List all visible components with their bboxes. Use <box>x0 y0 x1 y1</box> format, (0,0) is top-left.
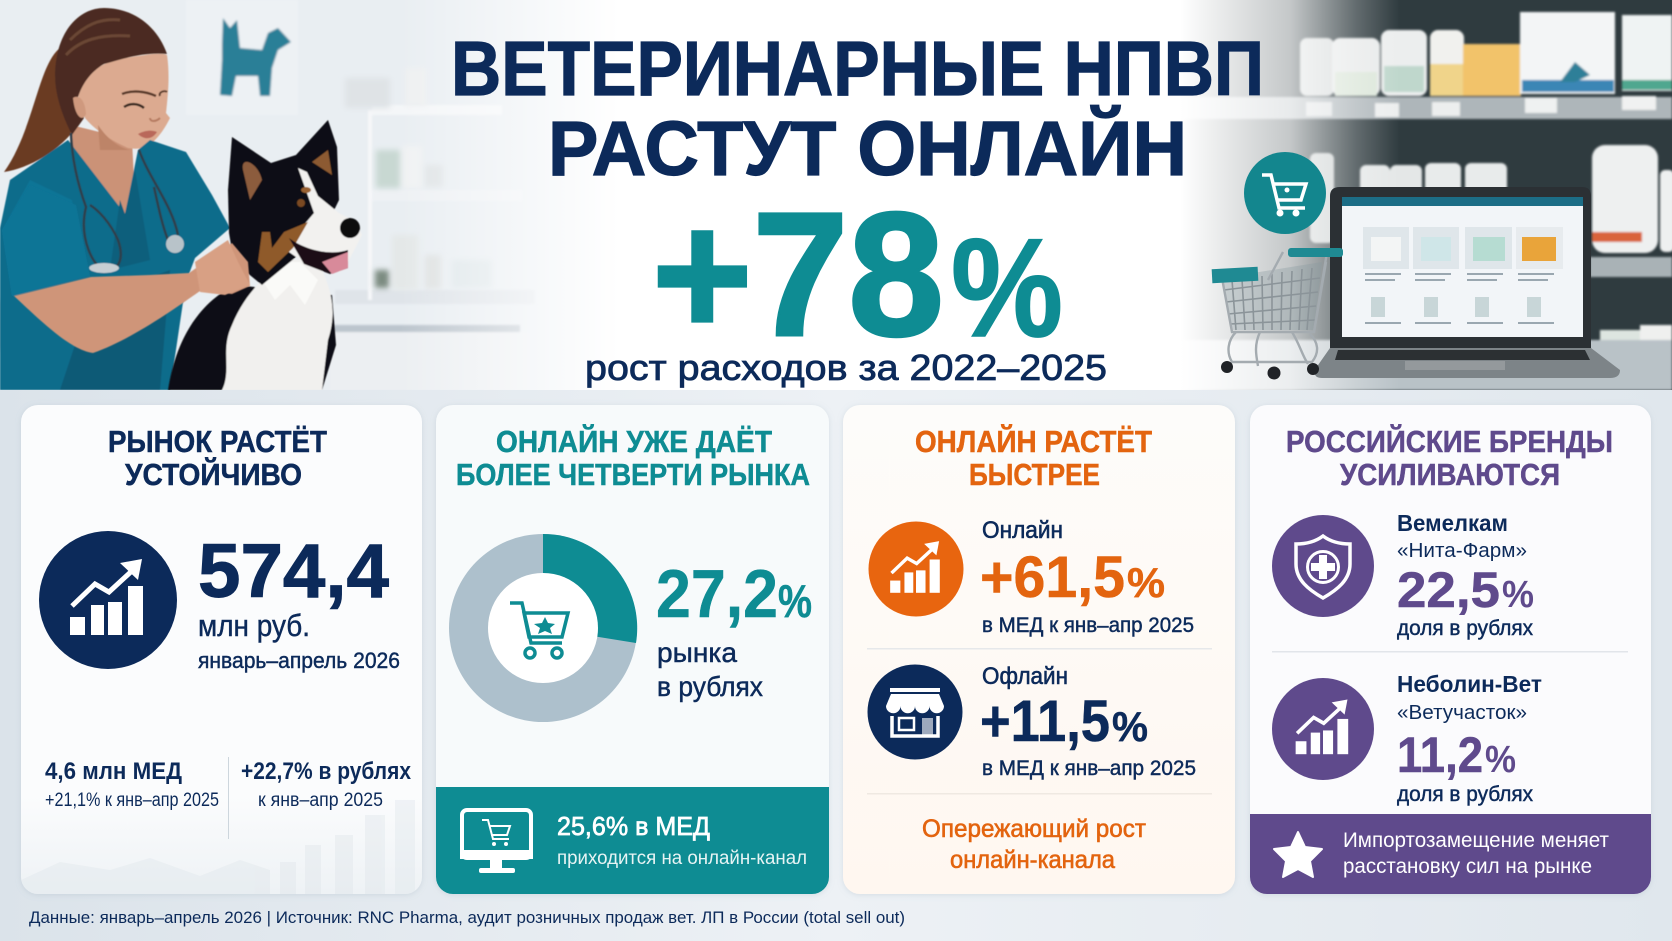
stat: MED: +21,1% к янв–апр 2025 <box>45 790 219 811</box>
band: MED share <box>436 787 829 894</box>
watermark chart <box>152 800 415 864</box>
callout <box>922 815 1147 874</box>
key figure: +78%: +78 <box>652 177 944 373</box>
icon: cart <box>510 603 568 658</box>
icon: star <box>1274 832 1322 877</box>
brand: Vemelkam: «Нита-Фарм» <box>1397 540 1527 562</box>
title: РАСТУТ ОНЛАЙН <box>548 104 1187 192</box>
band: MED share: приходится на онлайн-канал <box>557 848 807 869</box>
heading: УСИЛИВАЮТСЯ <box>1340 457 1560 492</box>
heading: ОНЛАЙН УЖЕ ДАЁТ <box>496 423 772 459</box>
shopping cart <box>1212 248 1343 380</box>
title <box>451 26 1264 192</box>
icon: teal cart badge <box>1244 152 1326 234</box>
callout: Опережающий рост <box>922 815 1147 843</box>
brand: Nebolin-Vet: % <box>1485 739 1516 781</box>
woman's arm on dog <box>13 204 250 354</box>
donut chart: 27.2% <box>449 534 637 722</box>
online stat: в МЕД к янв–апр 2025 <box>982 614 1194 637</box>
title: ВЕТЕРИНАРНЫЕ НПВП <box>451 26 1264 112</box>
brand: Vemelkam <box>1397 510 1534 640</box>
panel: market grows steadily <box>21 405 422 894</box>
unit: млн руб. <box>198 608 310 643</box>
woman <box>0 8 230 390</box>
heading: БЫСТРЕЕ <box>969 457 1100 492</box>
dog <box>168 120 362 390</box>
band: MED share: 25,6% в МЕД <box>557 811 710 841</box>
caption <box>657 637 763 702</box>
footer source note: Данные: январь–апрель 2026 | Источник: RNC Pharma, аудит розничных продаж вет. ЛП в России (total sell out) <box>29 908 905 927</box>
brand: Nebolin-Vet: «Ветучасток» <box>1397 702 1527 724</box>
icon: monitor with cart <box>460 810 533 873</box>
brand: Vemelkam: Вемелкам <box>1397 510 1508 536</box>
brand: Vemelkam: % <box>1502 574 1534 616</box>
online stat: +61,5 <box>980 545 1125 610</box>
caption: в рублях <box>657 671 763 702</box>
icon: shield <box>1272 515 1374 617</box>
offline stat: +11,5 <box>980 689 1110 754</box>
subtitle: рост расходов за 2022–2025 <box>585 347 1107 388</box>
laptop <box>1315 187 1620 378</box>
stat: MED: 4,6 млн МЕД <box>45 758 182 785</box>
heading: БОЛЕЕ ЧЕТВЕРТИ РЫНКА <box>456 457 810 492</box>
band: import substitution: расстановку сил на рынке <box>1343 855 1592 878</box>
panel: russian brands <box>1250 405 1651 894</box>
heading: РОССИЙСКИЕ БРЕНДЫ <box>1286 423 1613 459</box>
heading <box>108 424 327 492</box>
heading <box>456 423 810 492</box>
heading: РЫНОК РАСТЁТ <box>108 424 327 459</box>
value: 27,2%: % <box>778 575 812 627</box>
online stat: % <box>1127 559 1165 606</box>
heading <box>915 423 1152 492</box>
stat: MED <box>45 758 219 811</box>
stat: rubles: +22,7% в рублях <box>241 758 412 785</box>
icon: growth chart purple <box>1272 678 1374 780</box>
hero photo: pharmacy shelves, laptop and cart <box>1195 0 1672 390</box>
offline stat <box>980 663 1196 780</box>
icon: growth chart <box>39 531 177 669</box>
heading <box>1286 423 1613 492</box>
callout: онлайн-канала <box>950 846 1115 874</box>
offline stat: Офлайн <box>982 663 1068 690</box>
heading: ОНЛАЙН РАСТЁТ <box>915 423 1152 459</box>
brand: Nebolin-Vet: Неболин-Вет <box>1397 671 1542 697</box>
key figure: +78%: % <box>951 209 1063 366</box>
band: import substitution <box>1250 814 1651 894</box>
stat: rubles: к янв–апр 2025 <box>258 790 383 811</box>
value: 574,4: 574,4 <box>198 529 389 614</box>
heading: УСТОЙЧИВО <box>125 456 302 492</box>
brand: Nebolin-Vet <box>1397 671 1542 806</box>
icon: store <box>868 664 962 760</box>
brand: Nebolin-Vet: доля в рублях <box>1397 783 1533 806</box>
icon: orange growth chart <box>868 522 964 616</box>
hero photo: veterinarian with dog <box>0 0 1220 390</box>
brand: Vemelkam: доля в рублях <box>1397 617 1533 640</box>
online stat: Онлайн <box>982 517 1063 544</box>
offline stat: % <box>1112 703 1148 750</box>
period: январь–апрель 2026 <box>198 648 400 673</box>
caption: рынка <box>657 637 737 668</box>
value: 27,2%: 27,2 <box>656 556 778 632</box>
brand: Vemelkam: 22,5 <box>1397 562 1500 618</box>
stat: rubles <box>241 758 412 811</box>
offline stat: в МЕД к янв–апр 2025 <box>982 757 1196 780</box>
online stat <box>980 517 1194 637</box>
band: import substitution: Импортозамещение меняет <box>1343 829 1609 852</box>
panel: online grows faster <box>843 405 1235 894</box>
brand: Nebolin-Vet: 11,2 <box>1397 727 1483 783</box>
panel: online share <box>436 405 829 894</box>
